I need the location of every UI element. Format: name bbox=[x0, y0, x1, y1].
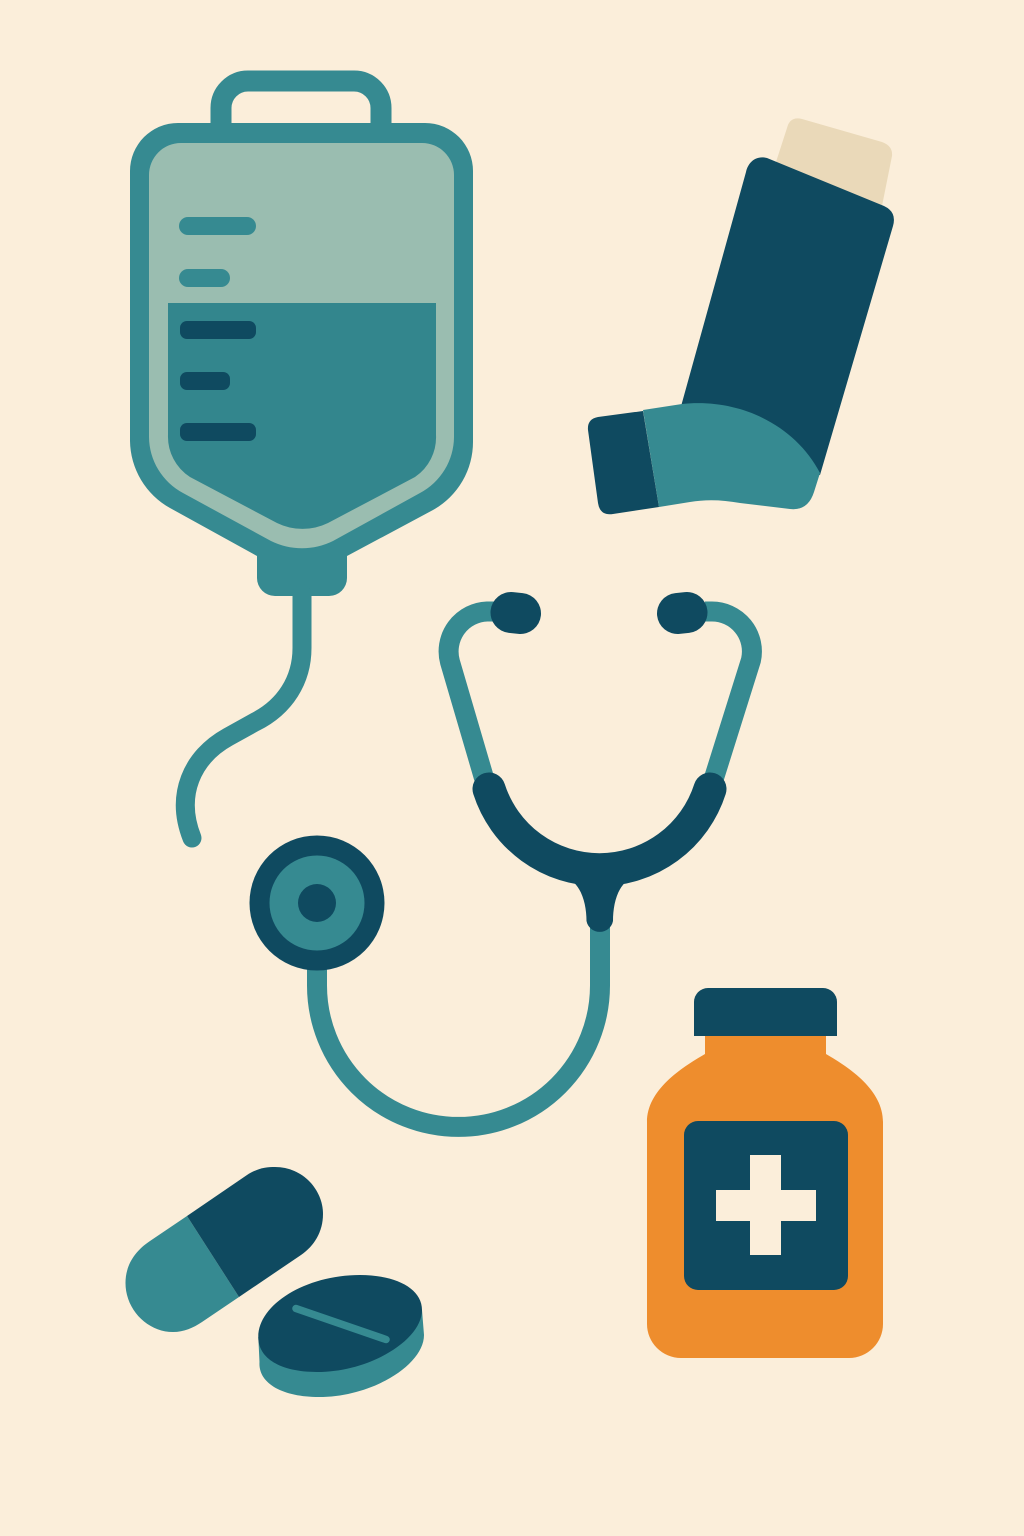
icon: IV bag bbox=[130, 81, 473, 838]
icon: inhaler bbox=[588, 118, 894, 514]
icon: tablet bbox=[258, 1275, 424, 1397]
icon: capsule bbox=[126, 1167, 323, 1332]
icon: stethoscope bbox=[250, 612, 752, 1127]
icon: medicine bottle bbox=[647, 988, 883, 1358]
